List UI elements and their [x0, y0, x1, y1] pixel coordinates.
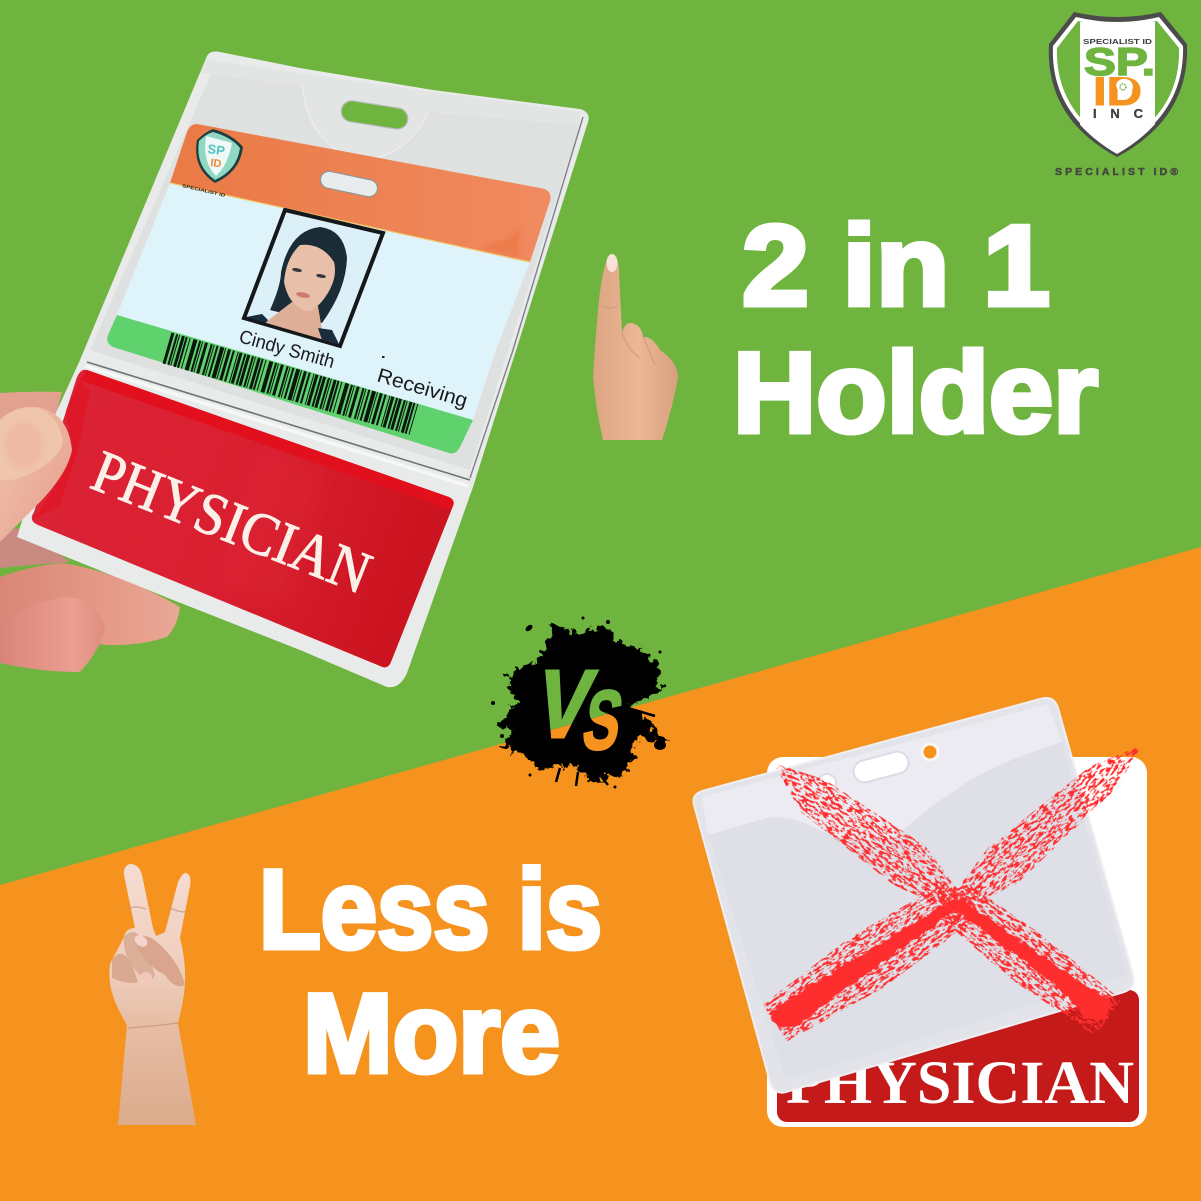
name: Cindy Smith — [237, 327, 337, 373]
photo frame — [244, 210, 383, 346]
top pocket area — [90, 72, 580, 470]
heading: Holder: Holder — [733, 330, 1098, 457]
id photo — [244, 210, 383, 346]
dash — [382, 356, 384, 358]
skin above thumb — [0, 392, 62, 430]
VS letters, green part: S — [577, 673, 629, 767]
top flap — [200, 60, 581, 159]
flap notch line — [303, 86, 428, 159]
VS splatter — [491, 616, 667, 788]
card body — [117, 183, 530, 420]
neck and chest — [265, 302, 334, 343]
red badge area — [777, 990, 1139, 1122]
icon: hand peace sign — [109, 864, 196, 1125]
VS letters, orange part: V — [528, 650, 603, 758]
shirt right — [318, 328, 338, 344]
logo: Specialist ID shield: ID — [1093, 70, 1142, 114]
card logo: SP — [207, 141, 226, 158]
logo: Specialist ID shield: SPECIALIST ID — [1083, 37, 1153, 46]
holder inner pocket — [708, 742, 1128, 1080]
icon: head in logo — [1116, 79, 1133, 96]
red cross-out X — [758, 730, 1157, 1048]
yellow edge of orange band — [170, 183, 530, 262]
clear vinyl holder body — [17, 52, 589, 687]
orange band reflection — [480, 228, 520, 258]
slot — [851, 749, 911, 785]
hand: thumb — [0, 407, 72, 542]
barcode — [167, 348, 416, 420]
icon: hand with one finger up — [593, 254, 678, 440]
card logo — [182, 129, 243, 198]
holder top flap — [702, 704, 1062, 841]
logo: Specialist ID shield — [1049, 12, 1187, 178]
right hole — [922, 744, 938, 760]
clear holder — [694, 698, 1134, 1093]
hair — [270, 227, 347, 323]
soft gloss — [220, 450, 330, 610]
heading: More: More — [303, 971, 560, 1096]
upper finger — [0, 563, 180, 645]
heading: 2 in 1: 2 in 1 — [742, 203, 1050, 330]
splat droplets — [491, 616, 666, 788]
heading: Less is: Less is — [259, 847, 602, 972]
left bright side — [33, 380, 90, 520]
logo: Specialist ID shield: SPECIALIST ID® — [1055, 166, 1178, 178]
red reveal badge — [32, 370, 454, 667]
arm: upper right — [940, 730, 1157, 924]
white badge — [767, 757, 1147, 1127]
splat streaks — [556, 708, 655, 786]
card logo: ID — [210, 157, 222, 171]
card logo: SPECIALIST ID — [182, 183, 227, 198]
arm: lower right — [937, 880, 1124, 1040]
logo: Specialist ID shield: INC — [1093, 106, 1144, 121]
badge text: PHYSICIAN — [83, 438, 380, 606]
top bright edge — [80, 370, 454, 510]
VS letters, orange part: S — [577, 673, 629, 767]
thumbnail — [0, 408, 63, 480]
eyes and lips — [292, 267, 326, 299]
VS letters, green part — [545, 670, 622, 730]
badge text: PHYSICIAN — [786, 1050, 1134, 1117]
card slot — [319, 170, 379, 198]
lower finger — [0, 597, 105, 672]
arm: lower left — [758, 876, 977, 1048]
hand behind holder: palm and fingers — [0, 392, 180, 672]
ink splat — [497, 625, 667, 780]
face — [284, 245, 335, 311]
department: Receiving — [375, 365, 470, 412]
VS letters, orange part — [550, 714, 618, 752]
2-in-1 badge holder — [17, 52, 589, 687]
palm — [0, 528, 70, 568]
red badge body — [32, 370, 454, 667]
holder slot — [340, 99, 409, 131]
curled fingers — [112, 932, 185, 986]
ID card — [107, 124, 551, 453]
left hole — [818, 774, 836, 792]
orange band — [170, 124, 551, 262]
green barcode band — [107, 315, 473, 453]
fold lines — [85, 362, 470, 486]
shirt left — [246, 314, 268, 323]
old way: separate badge and holder — [694, 698, 1157, 1127]
VS letters, green part: V — [528, 650, 603, 758]
background: orange lower diagonal area — [0, 547, 1201, 1201]
arm: upper left — [761, 744, 976, 925]
logo: Specialist ID shield: SP. — [1084, 41, 1155, 84]
holder inner side line — [470, 117, 583, 478]
